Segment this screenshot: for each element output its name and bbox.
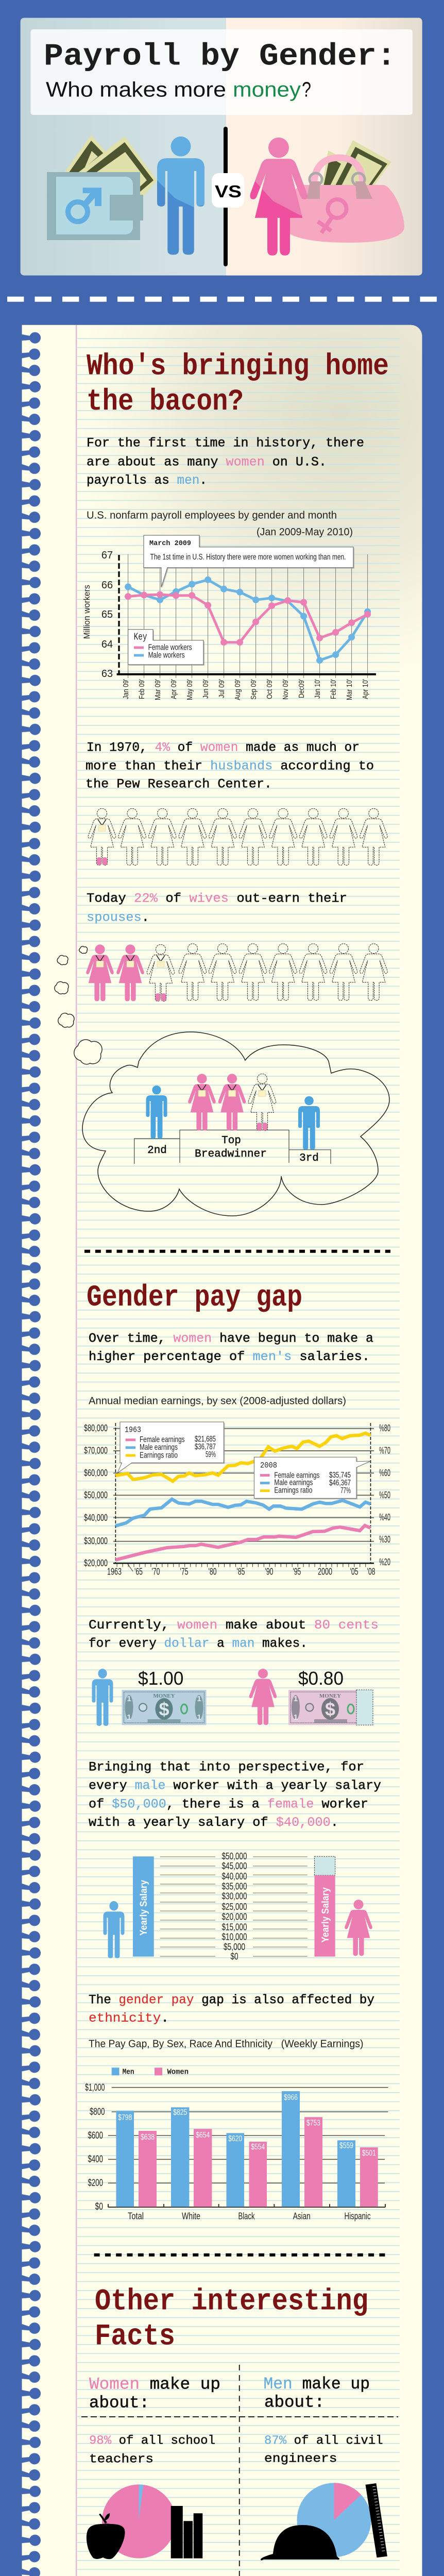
x axis years: '85	[237, 1567, 245, 1577]
x axis years: 1963	[107, 1567, 122, 1577]
bar: female salary: Yearly Salary	[320, 1887, 331, 1942]
column heading: women: about:	[89, 2394, 149, 2413]
callout: 1963: $21,685	[195, 1435, 216, 1444]
heading: who's bringing home the bacon: Who's bringing home	[87, 350, 389, 384]
left axis labels: $50,000	[84, 1490, 108, 1500]
icon: dollar bill: 1	[127, 1694, 131, 1703]
right axis labels: %60	[379, 1468, 390, 1478]
callout: March 2009	[144, 535, 354, 588]
text: 22 percent of wives: Today 22% of wives out-earn their	[87, 891, 347, 906]
thought bubble puffs	[55, 946, 102, 1064]
salary labels: $20,000	[221, 1911, 247, 1922]
right axis labels: %50	[379, 1490, 390, 1500]
x axis labels: Jan 10'	[313, 679, 322, 699]
fact: school teachers	[87, 2434, 215, 2559]
icon: partial dollar bill: MONEY	[319, 1693, 341, 1699]
salary labels: $50,000	[221, 1851, 247, 1861]
pictogram: 4 percent of women	[88, 808, 387, 865]
bars and values: asian	[282, 2091, 322, 2207]
icon: man	[157, 137, 204, 255]
salary labels: $15,000	[221, 1922, 247, 1932]
right axis labels: %40	[379, 1512, 390, 1522]
bars and values: hispanic: $559	[339, 2141, 353, 2150]
salary labels	[221, 1851, 247, 1961]
left axis labels: $80,000	[84, 1423, 108, 1433]
figure: woman with dollar	[249, 1669, 277, 1725]
column heading: men: Men make up	[264, 2375, 370, 2394]
text: ethnicity	[89, 1992, 374, 2026]
y axis labels: 64	[101, 639, 113, 650]
bar: male salary	[133, 1856, 154, 1957]
category labels: Hispanic	[344, 2211, 371, 2221]
podium	[134, 1130, 331, 1164]
value axis labels: $600	[88, 2130, 103, 2141]
callout: 1963: Earnings ratio	[140, 1451, 178, 1460]
fact: school teachers: teachers	[89, 2452, 153, 2466]
podium labels: Breadwinner	[195, 1148, 267, 1160]
bars and values: asian: $966	[284, 2093, 298, 2102]
facts table dashed grid	[81, 2365, 398, 2576]
text: 1970 statistic	[86, 740, 374, 791]
text: first time in history	[87, 436, 364, 488]
category labels	[128, 2211, 371, 2221]
salary labels: $30,000	[221, 1891, 247, 1902]
text: bringing into perspective: every male worker with a yearly salary	[89, 1778, 381, 1793]
x axis labels: Nov 09'	[281, 679, 290, 700]
icon: dollar bill: 1	[197, 1694, 201, 1703]
series: female earnings	[115, 1526, 370, 1560]
text: bringing into perspective: Bringing that into perspective, for	[89, 1760, 364, 1775]
series: male earnings	[115, 1499, 370, 1526]
legend	[112, 2067, 189, 2076]
y axis labels	[82, 550, 113, 680]
text: bringing into perspective	[89, 1760, 381, 1830]
bars and values: asian: $753	[306, 2119, 320, 2128]
series: female workers	[125, 591, 371, 646]
heading: who's bringing home the bacon	[87, 350, 389, 419]
legend: key: Female workers	[148, 643, 192, 652]
subtitle: Who makes more	[46, 77, 226, 101]
bars and values: hispanic: $501	[362, 2149, 376, 2158]
chart title: nonfarm payroll: (Jan 2009-May 2010)	[257, 527, 353, 538]
bars and values: black: $554	[251, 2143, 265, 2151]
podium labels: 2nd	[147, 1145, 167, 1157]
text: ethnicity: ethnicity.	[89, 2011, 169, 2026]
fact: civil engineers: engineers	[264, 2452, 337, 2466]
value axis labels: $200	[88, 2178, 103, 2189]
bar: female salary	[314, 1856, 335, 1957]
callout: 2008: $35,745	[329, 1471, 351, 1480]
x axis labels: Apr 10'	[361, 679, 370, 699]
legend: key: Male workers	[148, 651, 185, 660]
podium labels: 3rd	[299, 1153, 319, 1164]
y axis labels: 63	[101, 668, 113, 680]
icon: ruler	[366, 2483, 387, 2557]
figure: man third	[298, 1096, 320, 1150]
text: first time in history: For the first time in history, there	[87, 436, 364, 451]
subtitle: ?	[302, 77, 311, 101]
chart title: pay gap by ethnicity: The Pay Gap, By Sex, Race And Ethnicity	[89, 2038, 272, 2049]
icon: partial dollar bill	[288, 1690, 373, 1725]
right axis labels: %70	[379, 1446, 390, 1456]
y axis labels: 65	[101, 609, 113, 620]
callout: 1963: 59%	[206, 1450, 216, 1459]
salary labels: $0	[231, 1951, 238, 1961]
pie: engineers	[297, 2483, 371, 2557]
value axis labels: $800	[90, 2107, 105, 2117]
left axis labels: $60,000	[84, 1468, 108, 1478]
bars and values: total: $638	[141, 2133, 155, 2142]
category labels: Black	[238, 2211, 255, 2221]
bars and values: total	[116, 2111, 157, 2207]
icon: dollar bill	[122, 1690, 206, 1725]
value axis labels: $400	[88, 2154, 103, 2165]
x axis labels: Dec09'	[297, 679, 306, 698]
y axis labels: 67	[101, 550, 113, 561]
right axis labels	[379, 1423, 390, 1567]
y axis labels: Million workers	[82, 585, 92, 639]
text: first time in history: payrolls as men.	[87, 473, 207, 488]
callout: March 2009: March 2009	[149, 539, 191, 548]
x axis years: 2000	[318, 1567, 332, 1577]
salary labels: $10,000	[221, 1931, 247, 1942]
header panel	[21, 18, 422, 276]
x axis labels: Sep 09'	[249, 679, 258, 700]
x axis labels: Apr 09'	[169, 679, 178, 699]
pie: teachers	[102, 2484, 176, 2558]
value axis labels: $0	[95, 2201, 103, 2212]
figures: women top	[188, 1074, 276, 1130]
left axis labels: $30,000	[84, 1536, 108, 1546]
chart title: nonfarm payroll: U.S. nonfarm payroll employees by gender and month	[87, 510, 337, 521]
stitched divider	[7, 297, 437, 302]
callout: 1963: Male earnings	[140, 1443, 178, 1452]
x axis labels: Oct 09'	[265, 679, 274, 699]
text: 22 percent of wives	[87, 891, 347, 925]
pictogram: 22 percent of wives	[86, 944, 387, 1001]
figure: man with dollar	[92, 1669, 113, 1726]
category labels: White	[182, 2211, 200, 2221]
bars and values: hispanic	[337, 2140, 378, 2207]
amount: eighty cents: $0.80	[298, 1668, 344, 1689]
gridlines	[108, 2088, 388, 2183]
icon: dollar bill: 1	[197, 1713, 201, 1722]
text: higher percentage: Over time, women have begun to make a	[89, 1331, 373, 1346]
x axis labels: Mar 10'	[345, 679, 354, 700]
callout: 2008: $46,367	[329, 1479, 351, 1487]
salary labels: $25,000	[221, 1902, 247, 1912]
left axis labels: $40,000	[84, 1513, 108, 1523]
callout: 1963: Female earnings	[140, 1435, 184, 1444]
right axis labels: %20	[379, 1557, 390, 1567]
x axis labels: Aug 09'	[233, 679, 242, 700]
legend: Men	[123, 2067, 134, 2076]
column heading: men	[264, 2375, 370, 2412]
title box	[30, 29, 413, 115]
text: bringing into perspective: of $50,000, there is a female worker	[89, 1797, 368, 1811]
x axis labels: Jul 09'	[217, 679, 226, 698]
x axis years: '80	[208, 1567, 216, 1577]
legend: key	[128, 630, 204, 666]
bar chart: weekly earnings by ethnicity	[85, 2067, 388, 2221]
x axis years: '08	[367, 1567, 375, 1577]
column heading: women: Women make up	[89, 2375, 220, 2394]
bar chart: yearly salary comparison	[103, 1851, 372, 1961]
text: ethnicity: The gender pay gap is also affected by	[89, 1992, 374, 2007]
heading: who's bringing home the bacon: the bacon?	[87, 385, 244, 419]
column heading: women	[89, 2375, 220, 2413]
text: higher percentage	[89, 1331, 373, 1364]
x axis labels: May 09'	[185, 679, 194, 700]
icon: woman	[250, 138, 307, 256]
series: earnings ratio	[115, 1433, 370, 1481]
heading: other interesting facts	[95, 2285, 368, 2354]
bars and values: total: $798	[118, 2113, 132, 2122]
icon: dollar bill: 1	[127, 1713, 131, 1722]
bars and values: white: $654	[196, 2131, 210, 2140]
fact: civil engineers: 87% of all civil	[264, 2434, 383, 2448]
icon: dollar bill: MONEY	[153, 1693, 175, 1699]
callout: 2008	[254, 1457, 370, 1499]
section divider	[84, 1250, 390, 1253]
text: 1970 statistic: In 1970, 4% of women made as much or	[87, 740, 360, 755]
icon: partial dollar bill: 1	[294, 1713, 298, 1722]
thought cloud with podium	[82, 1032, 389, 1216]
category labels: Asian	[293, 2211, 311, 2221]
callout: 2008: 77%	[340, 1486, 351, 1495]
text: bringing into perspective: with a yearly salary of $40,000.	[89, 1815, 338, 1830]
x axis labels: Feb 09'	[138, 679, 146, 699]
text: 1970 statistic: the Pew Research Center.	[86, 776, 272, 791]
x axis labels	[122, 679, 370, 700]
x axis labels: Jun 09'	[201, 679, 210, 699]
icon: hard hat	[261, 2525, 339, 2561]
chart title: pay gap by ethnicity: (Weekly Earnings)	[281, 2038, 364, 2049]
callout: March 2009: The 1st time in U.S. History there were more women working than men.	[150, 553, 346, 562]
callout: 2008: Female earnings	[274, 1471, 319, 1480]
title: Payroll by Gender:	[44, 40, 396, 75]
bar: male salary: Yearly Salary	[139, 1880, 149, 1936]
x axis years: '05	[350, 1567, 358, 1577]
bars and values: black	[227, 2133, 267, 2207]
bars and values: white: $825	[173, 2108, 187, 2117]
figure: woman	[345, 1900, 372, 1956]
x axis labels: Jan 09'	[122, 679, 130, 699]
section divider	[94, 2253, 385, 2257]
amount: one dollar: $1.00	[138, 1668, 183, 1689]
right axis labels: %80	[379, 1423, 390, 1433]
fact: civil engineers	[261, 2434, 387, 2561]
x axis years: '70	[151, 1567, 160, 1577]
versus divider	[212, 127, 244, 266]
x axis labels: Mar 09'	[153, 679, 162, 700]
heading: gender pay gap: Gender pay gap	[87, 1281, 302, 1315]
left axis labels: $20,000	[84, 1558, 108, 1568]
bars and values: white	[171, 2107, 212, 2207]
heading: other interesting facts: Other interesting	[95, 2285, 368, 2319]
icon: wallet with bills	[47, 135, 157, 240]
chart title: annual median earnings: Annual median earnings, by sex (2008-adjusted dollars)	[89, 1396, 346, 1407]
callout: 2008: Earnings ratio	[274, 1486, 312, 1495]
tick lines	[160, 1857, 308, 1956]
x axis years: '95	[293, 1567, 301, 1577]
figure: man second	[146, 1086, 167, 1139]
callout: 1963: $36,787	[195, 1443, 216, 1451]
fact: school teachers: 98% of all school	[89, 2434, 215, 2448]
x axis years: '65	[134, 1567, 143, 1577]
text: 80 cents: Currently, women make about 80 cents	[89, 1618, 379, 1633]
bars and values: black: $620	[228, 2134, 242, 2143]
subtitle: money	[233, 77, 301, 101]
right axis labels: %30	[379, 1534, 390, 1545]
x axis years	[107, 1567, 375, 1577]
podium labels: Top	[221, 1135, 241, 1147]
podium labels	[147, 1135, 319, 1164]
icon: books	[171, 2506, 202, 2558]
figure: man	[103, 1901, 125, 1958]
value axis labels	[85, 2082, 105, 2212]
value axis labels: $1,000	[85, 2082, 105, 2093]
series: male workers	[125, 577, 371, 664]
line chart: annual median earnings	[84, 1422, 390, 1577]
versus divider: VS	[215, 182, 242, 201]
icon: handbag with bills	[282, 140, 404, 243]
text: 80 cents: for every dollar a man makes.	[89, 1636, 308, 1651]
salary labels: $45,000	[221, 1861, 247, 1871]
icon: apple	[87, 2513, 125, 2559]
x axis labels: Feb 10'	[329, 679, 338, 699]
category labels: Total	[128, 2211, 144, 2221]
callout: 1963: 1963	[125, 1425, 141, 1434]
x axis years: '75	[180, 1567, 189, 1577]
icon: dollar bill: $	[159, 1699, 169, 1720]
text: 1970 statistic: more than their husbands according to	[86, 758, 374, 773]
left axis labels	[84, 1423, 108, 1568]
heading: other interesting facts: Facts	[95, 2320, 175, 2354]
legend: Women	[167, 2067, 189, 2076]
text: 22 percent of wives: spouses.	[87, 910, 149, 925]
text: first time in history: are about as many women on U.S.	[87, 454, 327, 469]
column heading: men: about:	[264, 2393, 325, 2412]
salary labels: $35,000	[221, 1881, 247, 1891]
callout: 2008: 2008	[260, 1461, 277, 1470]
y axis labels: 66	[101, 580, 113, 591]
text: 80 cents	[89, 1618, 379, 1651]
legend: key: Key	[134, 632, 147, 643]
chart title: pay gap by ethnicity	[89, 2038, 364, 2049]
callout: 2008: Male earnings	[274, 1479, 313, 1487]
subtitle	[46, 77, 311, 101]
icon: partial dollar bill: $	[325, 1699, 335, 1720]
x axis years: '90	[265, 1567, 273, 1577]
callout: 1963	[117, 1422, 225, 1473]
salary labels: $5,000	[224, 1942, 245, 1952]
line chart: payroll employees by gender	[82, 535, 376, 700]
salary labels: $40,000	[221, 1871, 247, 1882]
chart title: nonfarm payroll	[87, 510, 353, 538]
text: higher percentage: higher percentage of men's salaries.	[89, 1349, 370, 1364]
icon: partial dollar bill: 1	[294, 1694, 298, 1703]
left axis labels: $70,000	[84, 1446, 108, 1456]
